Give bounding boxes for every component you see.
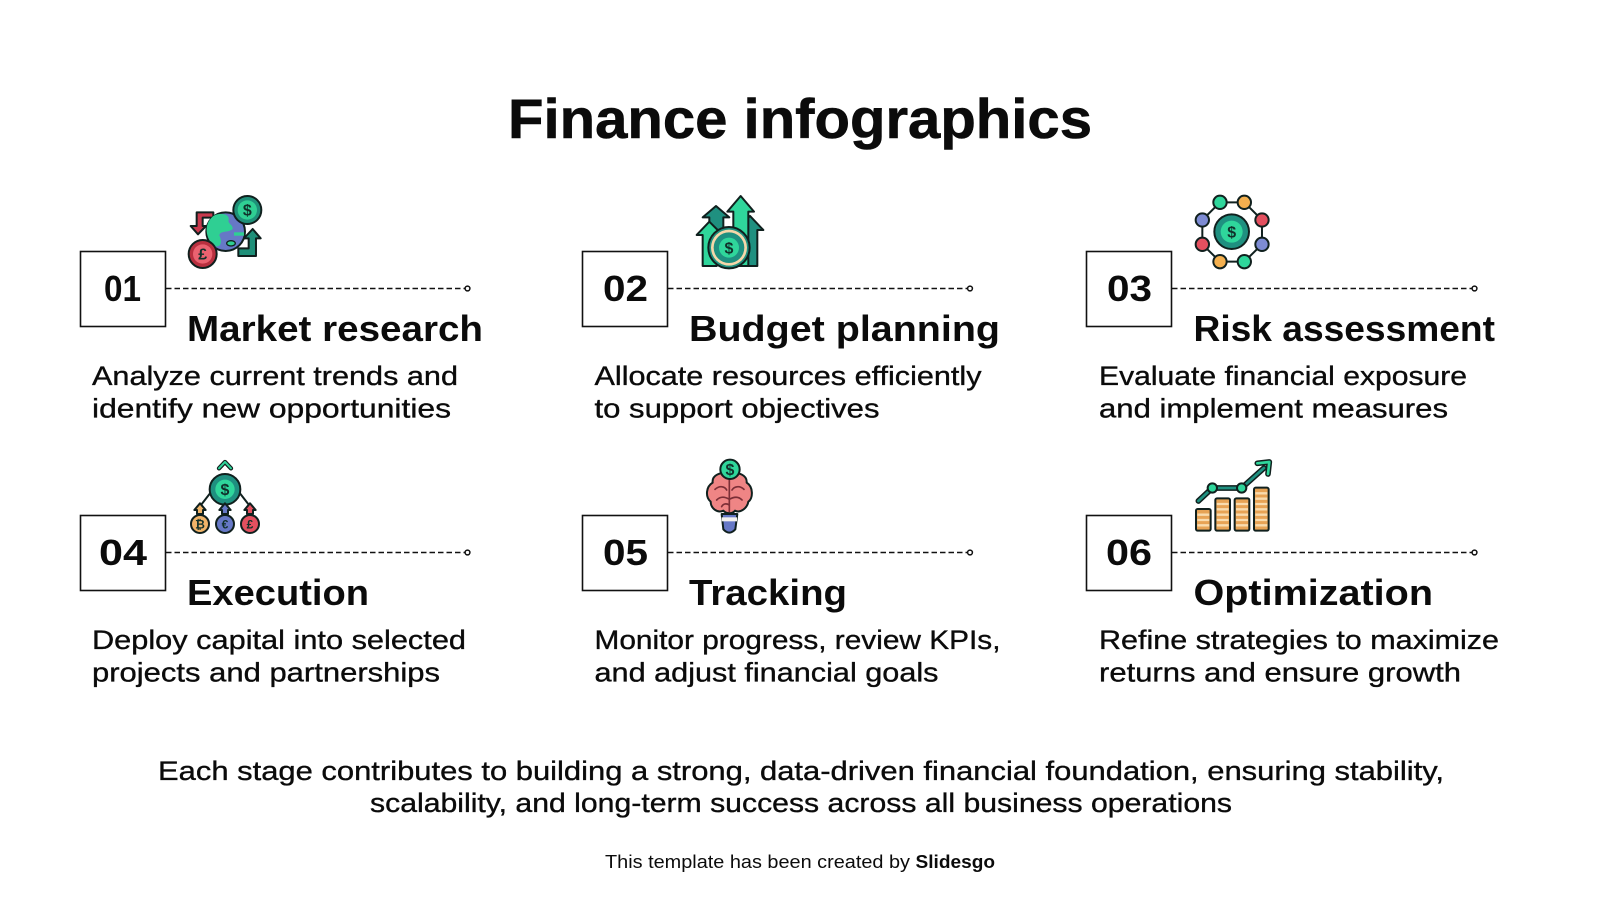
description: Refine strategies to maximize (1099, 625, 1499, 655)
icon: globe with currency exchange (189, 196, 261, 268)
title: Finance infographics (508, 87, 1092, 150)
number box 02 (582, 252, 668, 326)
icon: coin stacks with growth arrow (1196, 462, 1269, 531)
panel: 06 optimization (1086, 462, 1499, 688)
heading: Optimization (1194, 572, 1433, 613)
description: returns and ensure growth (1099, 658, 1461, 688)
icon: coin splitting into currencies: € (222, 517, 229, 531)
credit line: Slidesgo (916, 852, 995, 872)
icon: rising arrows with coin (697, 196, 763, 268)
description: Monitor progress, review KPIs, (594, 625, 1000, 655)
connector line 06 (1172, 550, 1477, 555)
panel: 01 market research (80, 196, 483, 424)
number box 06: 06 (1106, 532, 1152, 573)
icon: globe with currency exchange: £ (198, 247, 207, 264)
description: Evaluate financial exposure (1099, 361, 1467, 391)
description (92, 625, 466, 688)
description: identify new opportunities (92, 394, 451, 424)
icon: coin splitting into currencies: £ (247, 517, 254, 531)
summary text: scalability, and long-term success across all business operations (370, 788, 1232, 818)
panel: 02 budget planning (582, 196, 1000, 424)
heading: Tracking (689, 572, 847, 613)
number box 05: 05 (603, 532, 648, 573)
icon: network around coin: $ (1227, 224, 1236, 241)
description: projects and partnerships (92, 658, 440, 688)
number box 02: 02 (603, 268, 648, 309)
connector line 02 (668, 286, 972, 291)
description (594, 361, 982, 424)
panel: 03 risk assessment (1086, 196, 1495, 424)
description: Analyze current trends and (92, 361, 458, 391)
number box 01: 01 (104, 268, 141, 309)
icon: coin splitting into currencies (191, 462, 259, 533)
number box 03 (1086, 252, 1172, 326)
description (594, 625, 1000, 688)
description: to support objectives (594, 394, 880, 424)
icon: coin splitting into currencies: ₿ (195, 517, 205, 531)
icon: rising arrows with coin: $ (725, 240, 734, 257)
heading: Execution (187, 572, 369, 613)
number box 05 (582, 516, 668, 590)
summary text (158, 756, 1444, 818)
icon: brain light bulb with coin (707, 460, 752, 533)
panel: 04 execution (80, 462, 470, 688)
heading: Risk assessment (1194, 308, 1495, 349)
connector line 03 (1172, 286, 1477, 291)
summary text: Each stage contributes to building a strong, data-driven financial foundation, ensuring stability, (158, 756, 1444, 786)
number box 01 (80, 252, 166, 326)
description: Allocate resources efficiently (594, 361, 982, 391)
heading: Budget planning (689, 308, 1000, 349)
description: Deploy capital into selected (92, 625, 466, 655)
connector line 04 (166, 550, 470, 555)
number box 04: 04 (99, 532, 147, 573)
number box 06 (1086, 516, 1172, 590)
icon: coin splitting into currencies: $ (221, 482, 230, 499)
description: and implement measures (1099, 394, 1448, 424)
number box 03: 03 (1107, 268, 1152, 309)
description: and adjust financial goals (594, 658, 938, 688)
description (1099, 361, 1467, 424)
panel: 05 tracking (582, 460, 1000, 688)
icon: brain light bulb with coin: $ (726, 462, 735, 479)
description (92, 361, 458, 424)
number box 04 (80, 516, 166, 590)
connector line 01 (166, 286, 470, 291)
connector line 05 (668, 550, 972, 555)
description (1099, 625, 1499, 688)
icon: network around coin (1196, 196, 1269, 268)
heading: Market research (187, 308, 483, 349)
credit line: This template has been created by (605, 852, 910, 872)
icon: globe with currency exchange: $ (243, 203, 252, 220)
